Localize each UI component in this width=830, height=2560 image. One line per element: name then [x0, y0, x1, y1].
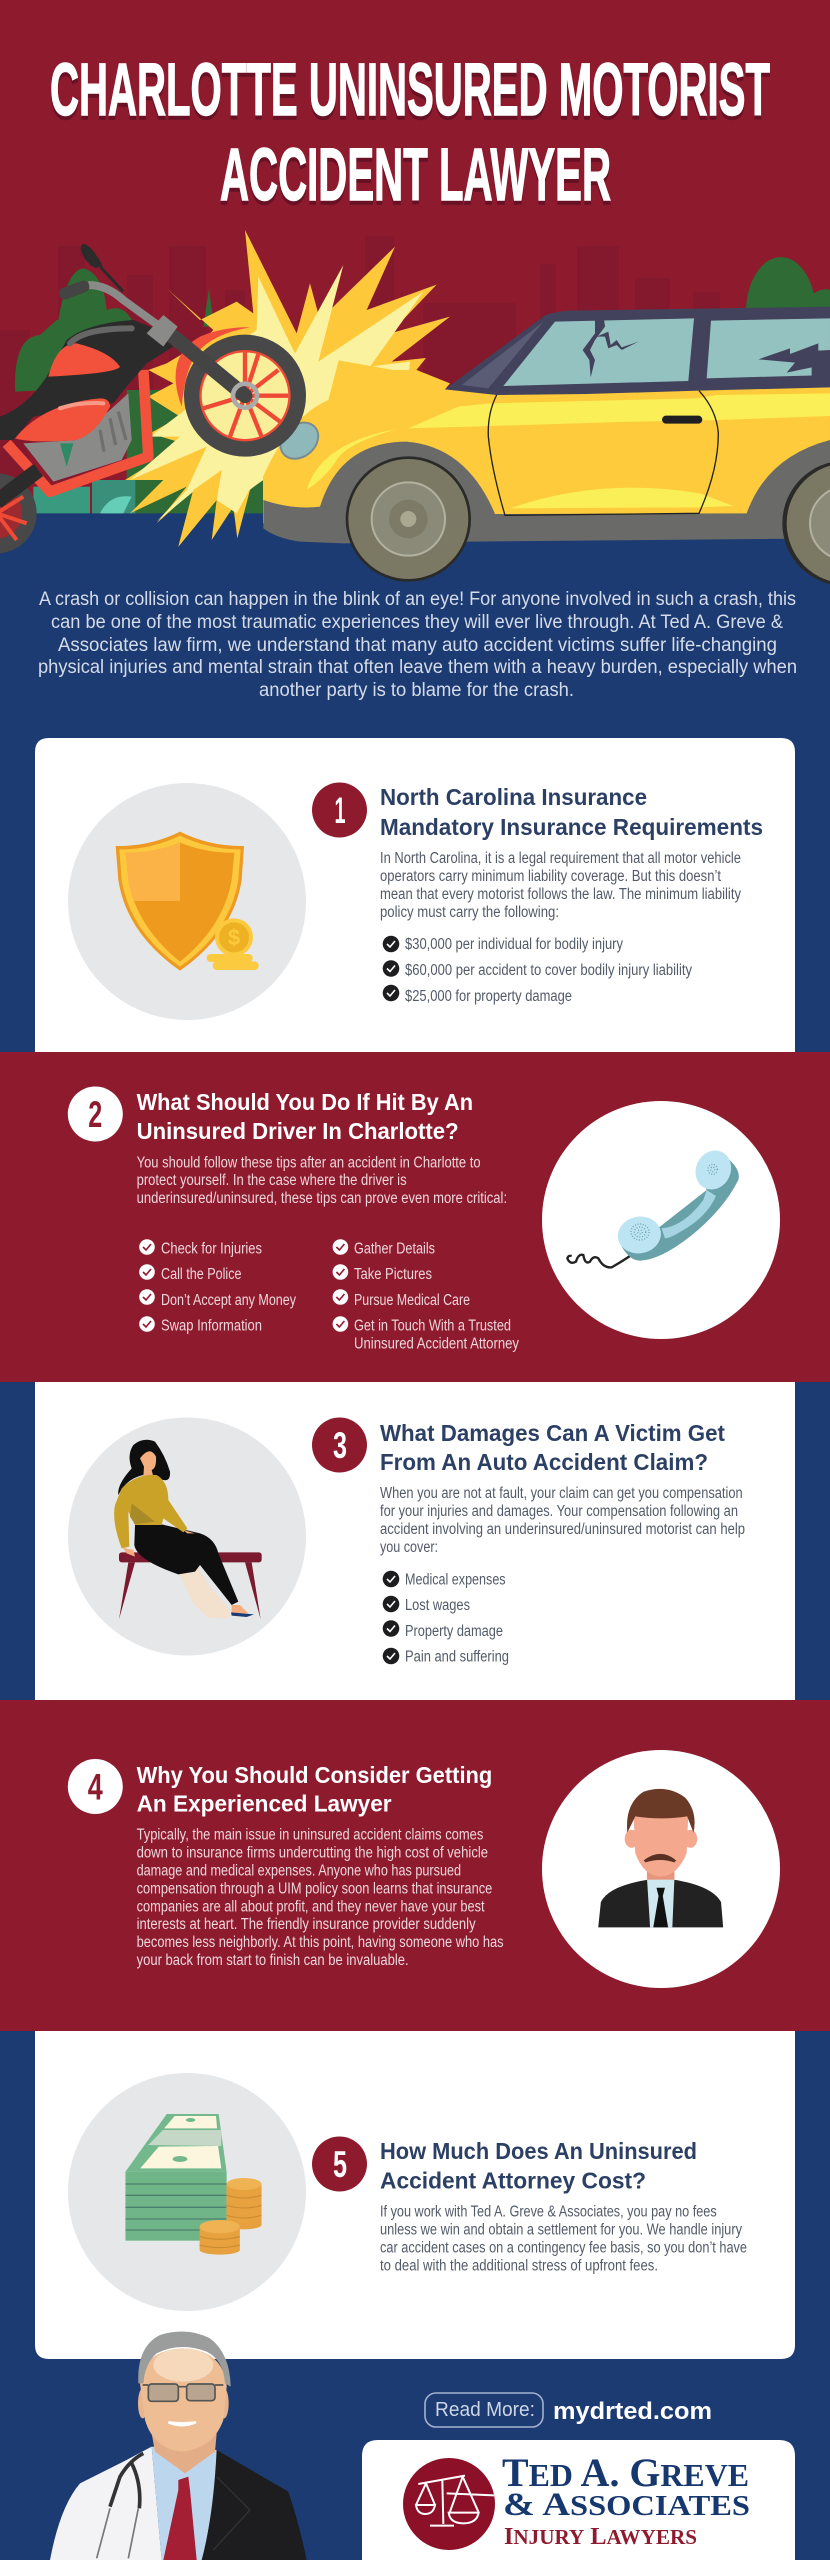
checklist	[383, 936, 692, 1005]
car	[263, 307, 830, 586]
checklist	[383, 1571, 509, 1666]
rear wheel	[782, 461, 830, 586]
body text: When you are not at fault, your claim can get you compensation	[380, 1485, 743, 1502]
number badge 3	[312, 1418, 367, 1472]
body text: operators carry minimum liability coverage. But this doesn’t	[380, 868, 722, 885]
intro text: can be one of the most traumatic experiences they will ever live through. At Ted A. Greve &	[51, 612, 783, 633]
icon: money stack and coins	[68, 2073, 306, 2311]
engine	[23, 393, 132, 482]
heading: North Carolina Insurance	[380, 784, 647, 810]
door outline	[488, 391, 718, 515]
body text: mean that every motorist follows the law. The minimum liability	[380, 886, 741, 903]
checklist: Lost wages	[405, 1597, 470, 1614]
icon: telephone handset	[542, 1101, 780, 1339]
intro text: Associates law firm, we understand that many auto accident victims suffer life-changing	[58, 635, 777, 656]
intro text: A crash or collision can happen in the blink of an eye! For anyone involved in such a crash, this	[39, 589, 796, 610]
website url: mydrted.com	[553, 2398, 712, 2425]
heading	[380, 1420, 725, 1475]
explosion	[125, 230, 450, 547]
card	[35, 2031, 795, 2359]
frame	[7, 370, 148, 492]
checklist: Medical expenses	[405, 1572, 506, 1588]
intro text: another party is to blame for the crash.	[259, 680, 574, 701]
panel: section 5 attorney cost	[35, 2031, 795, 2359]
red sky backdrop	[0, 0, 830, 513]
panel: section 2 what to do	[0, 1052, 830, 1382]
heading	[380, 2138, 697, 2194]
windows	[503, 318, 694, 386]
hub and fork	[173, 337, 245, 396]
card	[35, 1382, 795, 1700]
checklist: $60,000 per accident to cover bodily injury liability	[405, 962, 692, 979]
icon: shield with coins	[68, 783, 306, 1020]
front wheel	[192, 342, 298, 449]
checklist: Don’t Accept any Money	[161, 1292, 296, 1309]
card	[362, 2440, 795, 2560]
heading: Accident Attorney Cost?	[380, 2168, 646, 2194]
panel: hero	[0, 0, 830, 586]
checklist: Take Pictures	[354, 1266, 432, 1283]
firm name: & A SSOCIATES	[503, 2487, 750, 2523]
roof	[445, 307, 830, 395]
checklist: Uninsured Accident Attorney	[354, 1336, 519, 1352]
headlight	[279, 417, 323, 460]
checklist	[139, 1239, 519, 1352]
number badge 5: 5	[333, 2144, 347, 2185]
mirror	[83, 248, 123, 292]
checklist: Gather Details	[354, 1240, 435, 1258]
handlebar and clamp	[88, 285, 160, 327]
checklist: Check for Injuries	[161, 1240, 262, 1258]
heading	[380, 784, 763, 840]
rear strut	[0, 470, 38, 502]
rear wheel	[0, 481, 29, 546]
checklist: Pain and suffering	[405, 1648, 509, 1666]
card	[35, 738, 795, 1052]
body text: to deal with the additional stress of upfront fees.	[380, 2258, 658, 2274]
portrait: doctor lawyer	[50, 2332, 307, 2560]
checklist: $25,000 for property damage	[405, 988, 572, 1005]
heading: Uninsured Driver In Charlotte?	[137, 1118, 459, 1144]
body text: protect yourself. In the case where the driver is	[137, 1172, 407, 1189]
seat	[15, 398, 110, 441]
body text: companies are all about profit, and they never have your best	[137, 1898, 485, 1916]
body text	[380, 1485, 745, 1556]
number badge 5	[312, 2136, 367, 2192]
number badge 1: 1	[334, 790, 346, 831]
checklist: Swap Information	[161, 1318, 262, 1334]
window cracks	[583, 319, 830, 377]
heading: What Damages Can A Victim Get	[380, 1420, 725, 1446]
heading: How Much Does An Uninsured	[380, 2138, 697, 2164]
heading	[137, 1089, 473, 1144]
intro text	[38, 589, 797, 701]
car body	[263, 360, 830, 523]
panel: section 3 damages	[35, 1382, 795, 1700]
body text: If you work with Ted A. Greve & Associates, you pay no fees	[380, 2204, 717, 2220]
body text: unless we win and obtain a settlement for you. We handle injury	[380, 2222, 742, 2238]
panel: section 4 experienced lawyer	[0, 1700, 830, 2031]
body text: car accident cases on a contingency fee basis, so you don’t have	[380, 2240, 747, 2256]
firm name: INJURY LAWYERS	[504, 2524, 697, 2550]
number badge 4	[68, 1759, 123, 1814]
body text: In North Carolina, it is a legal requirement that all motor vehicle	[380, 850, 741, 867]
title	[50, 48, 770, 216]
heading: What Should You Do If Hit By An	[137, 1089, 473, 1115]
car highlights	[408, 393, 830, 428]
heading: Mandatory Insurance Requirements	[380, 814, 763, 840]
body text: your back from start to finish can be invaluable.	[137, 1952, 409, 1969]
firm name: TED A. GREVE	[502, 2450, 749, 2495]
heading: Why You Should Consider Getting	[137, 1762, 492, 1788]
read more link	[425, 2393, 712, 2427]
icon: lawyer portrait	[542, 1750, 780, 1988]
panel: section 1 insurance requirements	[35, 738, 795, 1052]
body text: becomes less neighborly. At this point, having someone who has	[137, 1934, 504, 1951]
checklist: Get in Touch With a Trusted	[354, 1318, 511, 1334]
number badge 2: 2	[88, 1094, 102, 1135]
door handle	[662, 416, 702, 424]
number badge 1	[312, 782, 367, 838]
intro text: physical injuries and mental strain that often leave them with a heavy burden, especially when	[38, 657, 797, 678]
checklist: Pursue Medical Care	[354, 1292, 470, 1309]
body text	[137, 1154, 507, 1207]
tank	[48, 343, 120, 377]
skirt and wheel arches	[263, 440, 830, 543]
body text: down to insurance firms undercutting the high cost of vehicle	[137, 1844, 488, 1862]
body text: accident involving an underinsured/uninsured motorist can help	[380, 1521, 745, 1538]
heading	[137, 1762, 492, 1816]
number badge 4: 4	[88, 1766, 103, 1808]
skyline silhouette	[0, 236, 720, 513]
black body	[0, 320, 173, 440]
body text: damage and medical expenses. Anyone who has pursued	[137, 1862, 461, 1880]
heading: From An Auto Accident Claim?	[380, 1449, 708, 1475]
body text	[137, 1826, 504, 1969]
body text: You should follow these tips after an accident in Charlotte to	[137, 1154, 481, 1172]
band	[0, 1700, 830, 2031]
body text: Typically, the main issue in uninsured accident claims comes	[137, 1826, 483, 1844]
body text: policy must carry the following:	[380, 904, 559, 921]
read more pill: Read More:	[435, 2399, 535, 2421]
icon: injured woman on bench	[68, 1418, 306, 1656]
body text: you cover:	[380, 1539, 438, 1556]
checklist: Call the Police	[161, 1266, 242, 1283]
fender	[176, 327, 250, 407]
panel: logo card	[362, 2440, 795, 2560]
body text: underinsured/uninsured, these tips can prove even more critical:	[137, 1190, 507, 1207]
icon: shield with coins: $	[228, 925, 240, 950]
read more pill	[425, 2393, 543, 2427]
tree behind car	[746, 257, 830, 367]
checklist: $30,000 per individual for bodily injury	[405, 936, 623, 953]
body text: interests at heart. The friendly insurance provider suddenly	[137, 1916, 476, 1933]
motorcycle	[0, 241, 298, 546]
number badge 3: 3	[333, 1425, 347, 1466]
body text	[380, 850, 741, 921]
trees and foliage	[15, 268, 267, 513]
front wheel	[346, 456, 471, 582]
body text: for your injuries and damages. Your compensation following an	[380, 1503, 738, 1520]
checklist: Property damage	[405, 1623, 503, 1640]
heading: An Experienced Lawyer	[137, 1790, 392, 1816]
body text: compensation through a UIM policy soon learns that insurance	[137, 1880, 492, 1898]
band	[0, 1052, 830, 1382]
firm name	[502, 2450, 750, 2550]
body text	[380, 2204, 747, 2274]
icon: scales of justice	[403, 2458, 495, 2550]
number badge 2	[68, 1086, 123, 1142]
